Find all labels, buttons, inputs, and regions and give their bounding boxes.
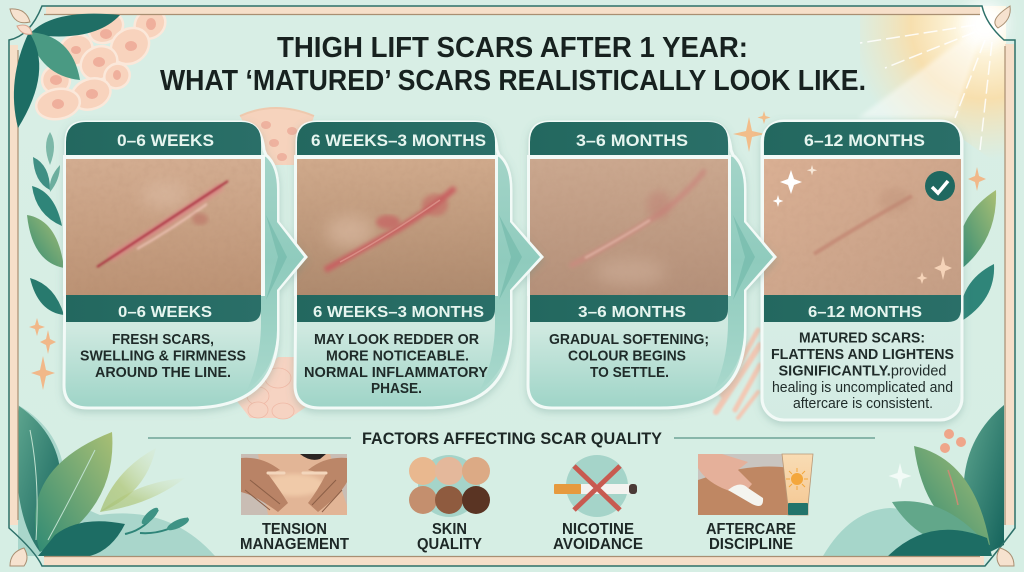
card 3 description: TO SETTLE. xyxy=(590,364,669,381)
card 4 description: MATURED SCARS: xyxy=(799,330,925,346)
card 2 description: MORE NOTICEABLE. xyxy=(326,348,469,364)
card 4 description: healing is uncomplicated and xyxy=(772,380,953,396)
card 4 description: aftercare is consistent. xyxy=(793,396,933,412)
card 1 description: AROUND THE LINE. xyxy=(95,364,231,381)
corner leaf bottom-left xyxy=(10,548,27,566)
panel: 6–12 months xyxy=(762,121,962,420)
card 4 description: SIGNIFICANTLY.provided xyxy=(778,364,946,380)
label: SKIN xyxy=(432,521,467,538)
label: DISCIPLINE xyxy=(709,536,793,553)
card 3 arrow fill xyxy=(714,157,773,390)
factor: skin quality xyxy=(409,455,490,553)
card 4 shape xyxy=(762,121,962,420)
card 2 shape with arrow xyxy=(295,122,542,408)
card 3 lower label xyxy=(530,295,728,322)
peach streaks between cards xyxy=(716,330,760,418)
icon: hands on thigh xyxy=(241,454,350,515)
label xyxy=(706,521,796,553)
card 4 lower label xyxy=(764,295,961,322)
factor: nicotine avoidance xyxy=(553,455,643,553)
right sparkle xyxy=(968,167,986,191)
card 3 header: 3–6 MONTHS xyxy=(576,132,688,150)
factor: tension management xyxy=(240,454,350,553)
card 2 description xyxy=(304,331,488,397)
card 1 lower label: 0–6 WEEKS xyxy=(118,304,212,321)
label: NICOTINE xyxy=(562,521,634,538)
right side leaves xyxy=(958,190,996,322)
icon: check badge xyxy=(925,171,955,201)
label xyxy=(553,521,643,553)
corner leaf bottom-right xyxy=(997,548,1014,566)
card 2 arrow fill xyxy=(480,157,540,390)
icon: crossed-out cigarette xyxy=(554,455,637,517)
title xyxy=(160,32,866,97)
card 1 header: 0–6 WEEKS xyxy=(117,132,214,150)
title: THIGH LIFT SCARS AFTER 1 YEAR: xyxy=(277,32,748,64)
label xyxy=(240,521,349,553)
skin cells top-left xyxy=(34,3,171,123)
icon: cream application photo xyxy=(698,454,790,515)
card 3 description: GRADUAL SOFTENING; xyxy=(549,331,709,348)
card 2 photo xyxy=(297,159,495,295)
bottom-left foliage xyxy=(16,405,215,556)
card 2 header xyxy=(297,122,495,155)
bottom-right foliage xyxy=(823,405,1004,556)
panel: 3–6 months xyxy=(527,122,775,408)
left sparkles xyxy=(29,318,56,390)
card 1 shape with arrow xyxy=(64,122,306,408)
card 1 description: SWELLING & FIRMNESS xyxy=(80,348,246,364)
card 2 description: NORMAL INFLAMMATORY xyxy=(304,364,488,381)
card 2 header: 6 WEEKS–3 MONTHS xyxy=(311,132,486,150)
corner leaf top-left xyxy=(10,9,120,128)
panel: 6 weeks–3 months xyxy=(294,122,542,408)
icon: skin tone swatches xyxy=(409,455,490,517)
label: MANAGEMENT xyxy=(240,536,349,553)
factor: aftercare discipline xyxy=(698,454,813,553)
left side leaves xyxy=(27,132,64,315)
card 3 description xyxy=(549,331,709,381)
sparkles above card 4 xyxy=(733,111,770,152)
skin cells behind cards, top xyxy=(240,108,314,165)
card 4 description xyxy=(771,330,954,412)
card 1 arrow fill xyxy=(247,157,304,390)
label: TENSION xyxy=(262,521,327,538)
card 2 lower label: 6 WEEKS–3 MONTHS xyxy=(313,304,484,321)
corner leaf top-right xyxy=(995,6,1010,28)
label: QUALITY xyxy=(417,536,482,553)
icon: sunscreen tube xyxy=(782,454,813,515)
sunburst decoration xyxy=(858,2,1007,170)
card 3 lower label: 3–6 MONTHS xyxy=(578,304,686,321)
card 2 description: MAY LOOK REDDER OR xyxy=(314,331,479,348)
card 1 header xyxy=(66,122,261,155)
panel: 0–6 weeks xyxy=(63,122,306,408)
card 1 description xyxy=(80,331,246,381)
label: AFTERCARE xyxy=(706,521,796,538)
card 3 header xyxy=(530,122,728,155)
card 3 description: COLOUR BEGINS xyxy=(568,348,686,364)
label xyxy=(417,521,482,553)
card 4 photo xyxy=(764,159,961,295)
skin cells behind cards, bottom xyxy=(236,357,316,419)
card 4 description: FLATTENS AND LIGHTENS xyxy=(771,346,954,363)
title: WHAT ‘MATURED’ SCARS REALISTICALLY LOOK LIKE. xyxy=(160,65,866,97)
card 2 description: PHASE. xyxy=(371,380,422,397)
card 1 description: FRESH SCARS, xyxy=(112,331,214,348)
card 2 lower label xyxy=(297,295,495,322)
heading: factors affecting scar quality: FACTORS AFFECTING SCAR QUALITY xyxy=(362,430,662,448)
label: AVOIDANCE xyxy=(553,536,643,553)
card 1 lower label xyxy=(66,295,261,322)
card 4 lower label: 6–12 MONTHS xyxy=(808,304,922,321)
card 3 photo xyxy=(530,159,728,295)
card 3 shape with arrow xyxy=(528,122,775,408)
card 4 header xyxy=(764,122,960,155)
card 4 header: 6–12 MONTHS xyxy=(804,132,925,150)
card 1 photo xyxy=(66,159,261,295)
